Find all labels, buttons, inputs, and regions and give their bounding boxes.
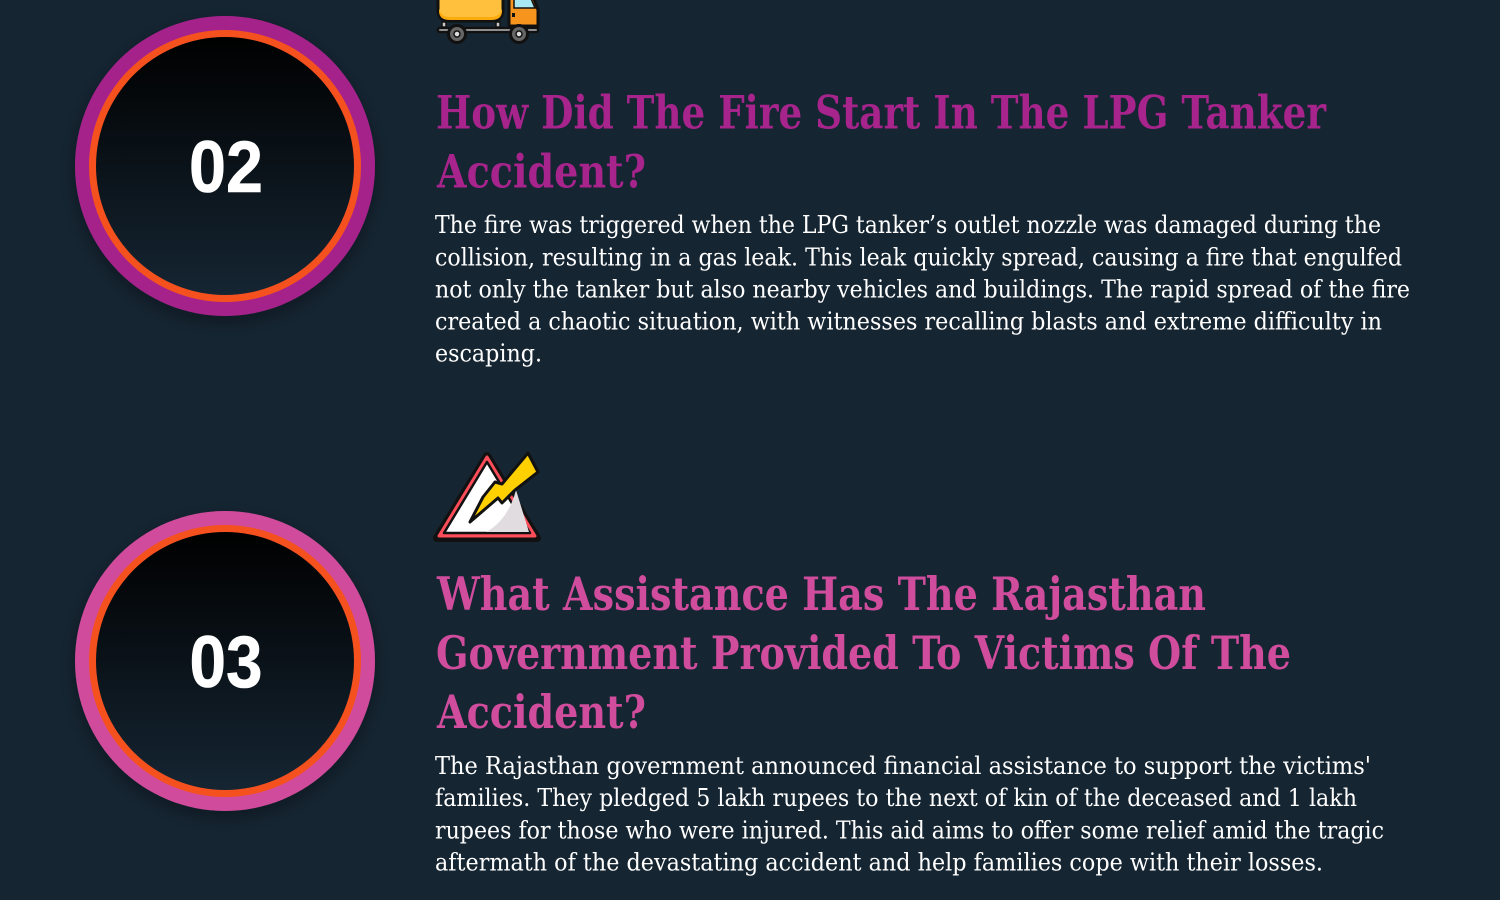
circle badge 02 [75,16,375,316]
text block: fire explanation: collision, resulting in a gas leak. This leak quickly spread, causing a fire that engulfed [435,244,1402,272]
text block: assistance explanation [435,752,1384,876]
heading: what assistance: Government Provided To Victims Of The [436,626,1291,680]
heading: how did the fire start: Accident? [436,144,646,198]
heading: what assistance: Accident? [436,685,646,739]
number 03: 03 [190,622,262,703]
text block: fire explanation: created a chaotic situation, with witnesses recalling blasts and extreme difficulty in [435,308,1382,336]
text block: fire explanation: not only the tanker but also nearby vehicles and buildings. The rapid spread of the fire [435,276,1410,304]
text block: assistance explanation: families. They pledged 5 lakh rupees to the next of kin of the deceased and 1 lakh [435,784,1357,812]
icon: warning triangle with lightning [437,453,538,538]
icon: tanker truck [438,0,538,42]
text block: fire explanation: escaping. [435,340,542,368]
heading: what assistance [436,567,1291,739]
text block: assistance explanation: The Rajasthan government announced financial assistance to support the victims' [435,752,1371,780]
text block: fire explanation: The fire was triggered when the LPG tanker’s outlet nozzle was damaged during the [435,211,1381,239]
heading: how did the fire start [436,86,1327,198]
circle badge 03 [75,511,375,811]
heading: what assistance: What Assistance Has The Rajasthan [436,567,1206,621]
text block: assistance explanation: aftermath of the devastating accident and help families cope with their losses. [435,848,1323,876]
text block: assistance explanation: rupees for those who were injured. This aid aims to offer some relief amid the tragic [435,816,1384,844]
number 02: 02 [189,127,263,208]
text block: fire explanation [435,211,1410,368]
